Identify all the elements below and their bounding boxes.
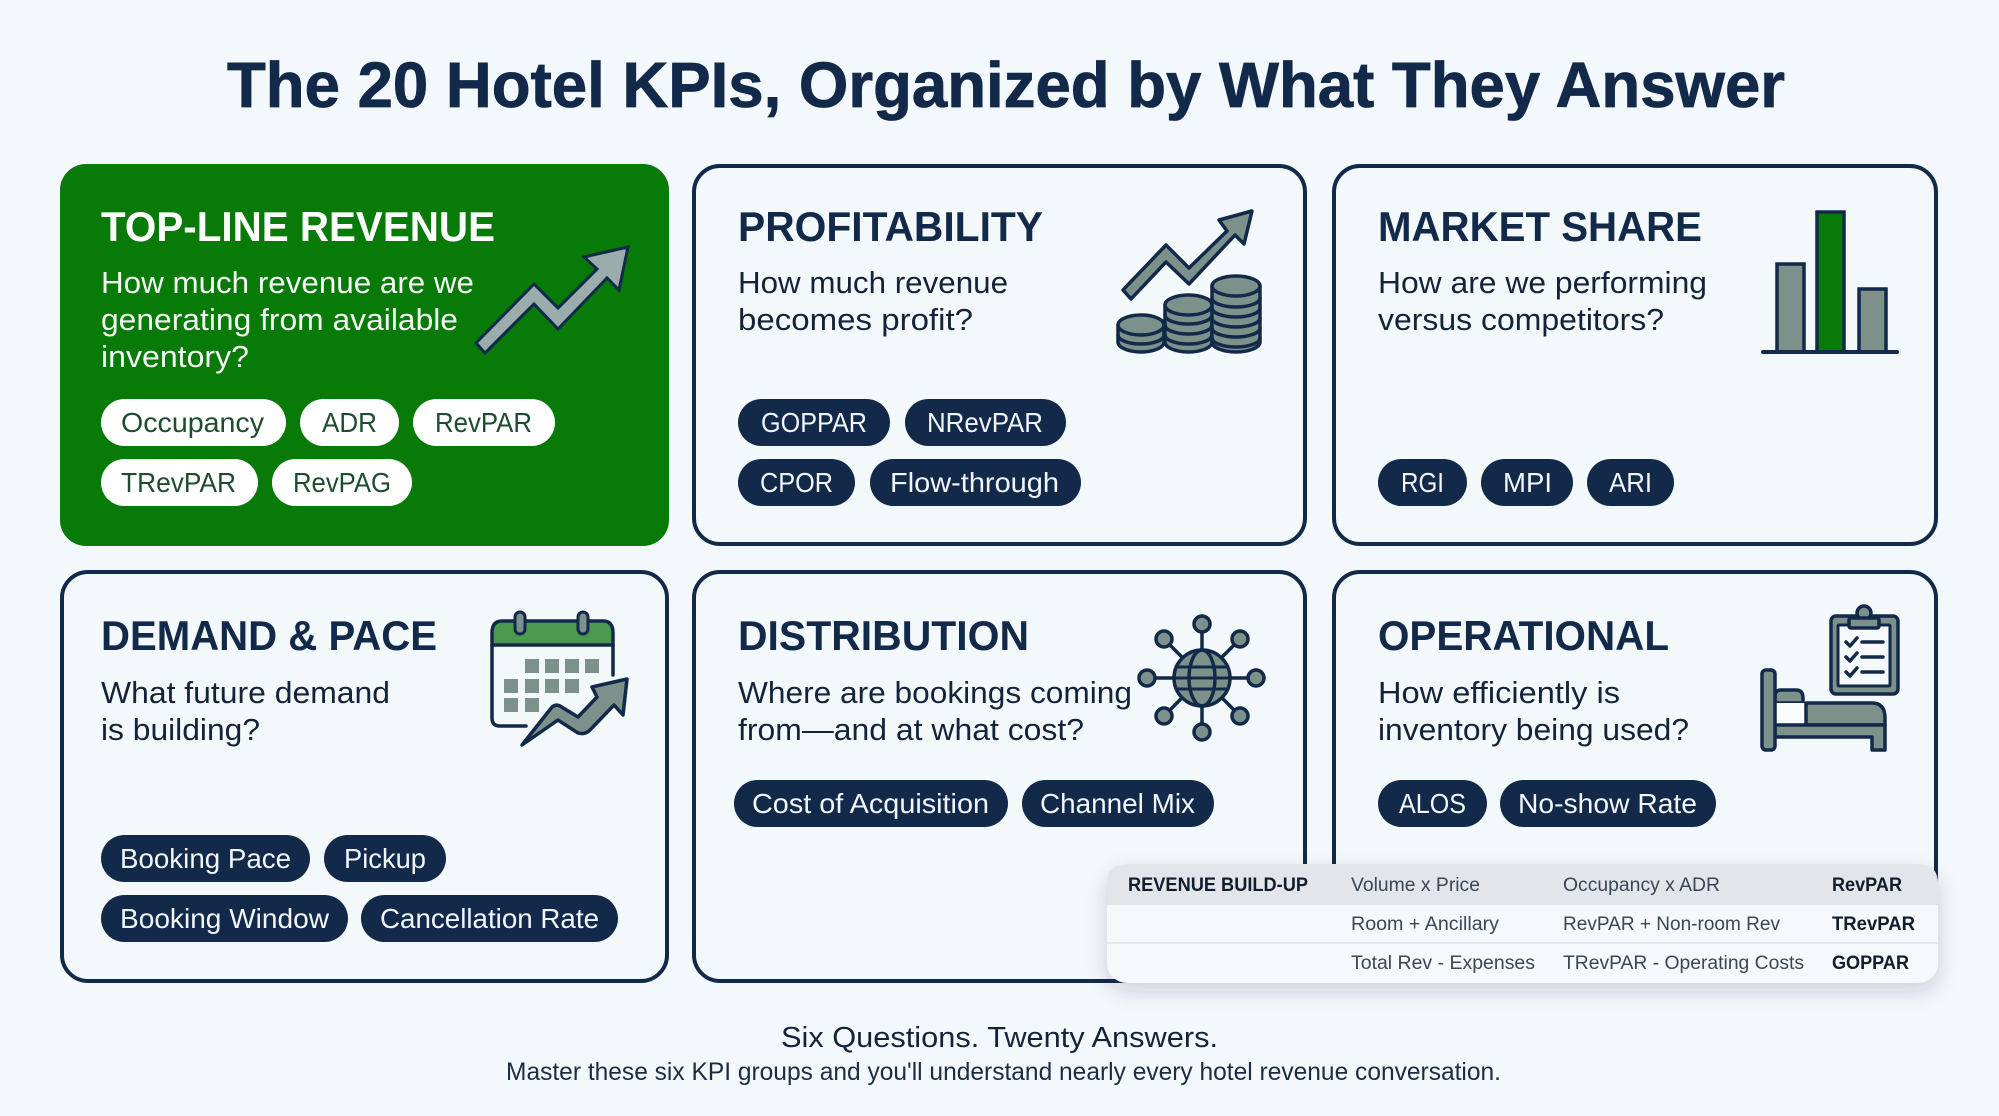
question text <box>1378 265 1707 337</box>
question text: versus competitors? <box>1378 302 1664 337</box>
question text: How much revenue <box>738 265 1008 300</box>
footer text <box>506 1022 1501 1086</box>
table row: revpar: Occupancy x ADR <box>1563 875 1720 896</box>
KPI pills: GOPPAR <box>761 407 867 438</box>
question text <box>1378 675 1689 747</box>
KPI pills: TRevPAR <box>121 467 236 498</box>
heading: top-line revenue: TOP-LINE REVENUE <box>101 203 495 250</box>
table row: trevpar <box>1351 914 1915 935</box>
question text: How efficiently is <box>1378 675 1620 710</box>
KPI pills <box>1378 780 1716 827</box>
question text: Where are bookings coming <box>738 675 1132 710</box>
footer text: Six Questions. Twenty Answers. <box>781 1022 1218 1054</box>
question text: What future demand <box>101 675 390 710</box>
KPI pills: Booking Pace <box>120 843 291 874</box>
KPI pills: ALOS <box>1399 788 1466 819</box>
icon: coins with rising arrow <box>1118 211 1260 352</box>
question text <box>738 675 1132 747</box>
icon: bar chart <box>1763 212 1897 352</box>
question text <box>101 265 474 374</box>
question text <box>101 675 390 747</box>
KPI pills: ARI <box>1609 467 1652 498</box>
KPI pills <box>734 780 1214 827</box>
icon: calendar with arrow <box>492 612 627 745</box>
question text: from—and at what cost? <box>738 712 1084 747</box>
heading: profitability: PROFITABILITY <box>738 203 1043 250</box>
panel: operational <box>1334 572 1936 981</box>
KPI pills: ADR <box>322 407 377 438</box>
question text: How much revenue are we <box>101 265 474 300</box>
KPI pills: Cancellation Rate <box>380 903 599 934</box>
KPI pills: Flow-through <box>890 467 1059 498</box>
KPI pills <box>738 399 1081 506</box>
panel: profitability <box>694 166 1305 544</box>
KPI pills: RevPAG <box>293 467 391 498</box>
table row: revpar <box>1128 875 1902 896</box>
KPI pills: Channel Mix <box>1040 788 1195 819</box>
heading: market share: MARKET SHARE <box>1378 203 1702 250</box>
KPI pills: Cost of Acquisition <box>752 788 989 819</box>
KPI pills: CPOR <box>760 467 833 498</box>
KPI pills: NRevPAR <box>927 407 1043 438</box>
table row: revpar: REVENUE BUILD-UP <box>1128 875 1308 896</box>
KPI pills: Occupancy <box>121 407 264 438</box>
footer text: Master these six KPI groups and you'll understand nearly every hotel revenue conversation. <box>506 1058 1501 1086</box>
table row: trevpar: Room + Ancillary <box>1351 914 1500 935</box>
panel: top-line revenue <box>60 164 669 546</box>
KPI pills <box>101 399 555 506</box>
heading: demand and pace: DEMAND & PACE <box>101 612 437 659</box>
table row: revpar: RevPAR <box>1832 875 1902 896</box>
KPI pills: RevPAR <box>435 407 532 438</box>
panel: market share <box>1334 166 1936 544</box>
question text: becomes profit? <box>738 302 973 337</box>
panel: distribution <box>694 572 1305 981</box>
table row: trevpar: TRevPAR <box>1832 914 1915 935</box>
KPI pills: No-show Rate <box>1518 788 1697 819</box>
icon: rising arrow <box>476 247 628 353</box>
table row: goppar <box>1351 953 1909 974</box>
title: The 20 Hotel KPIs, Organized by What They Answer <box>227 49 1785 121</box>
KPI pills: MPI <box>1503 467 1552 498</box>
panel: demand and pace <box>62 572 667 981</box>
question text: generating from available <box>101 302 458 337</box>
KPI pills: Pickup <box>344 843 426 874</box>
table: revenue build-up <box>1107 864 1938 983</box>
question text: inventory being used? <box>1378 712 1689 747</box>
KPI pills: Booking Window <box>120 903 329 934</box>
question text <box>738 265 1008 337</box>
KPI pills: RGI <box>1401 467 1444 498</box>
KPI pills <box>1378 459 1674 506</box>
question text: is building? <box>101 712 260 747</box>
table row: goppar: GOPPAR <box>1832 953 1909 974</box>
icon: globe network <box>1139 616 1264 740</box>
table row: trevpar: RevPAR + Non-room Rev <box>1563 914 1780 935</box>
table row: goppar: Total Rev - Expenses <box>1351 953 1535 974</box>
heading: operational: OPERATIONAL <box>1378 612 1669 659</box>
icon: bed and clipboard <box>1762 606 1898 750</box>
KPI pills <box>101 835 618 942</box>
heading: distribution: DISTRIBUTION <box>738 612 1029 659</box>
question text: inventory? <box>101 339 249 374</box>
question text: How are we performing <box>1378 265 1707 300</box>
table row: goppar: TRevPAR - Operating Costs <box>1563 953 1804 974</box>
table row: revpar: Volume x Price <box>1351 875 1480 896</box>
